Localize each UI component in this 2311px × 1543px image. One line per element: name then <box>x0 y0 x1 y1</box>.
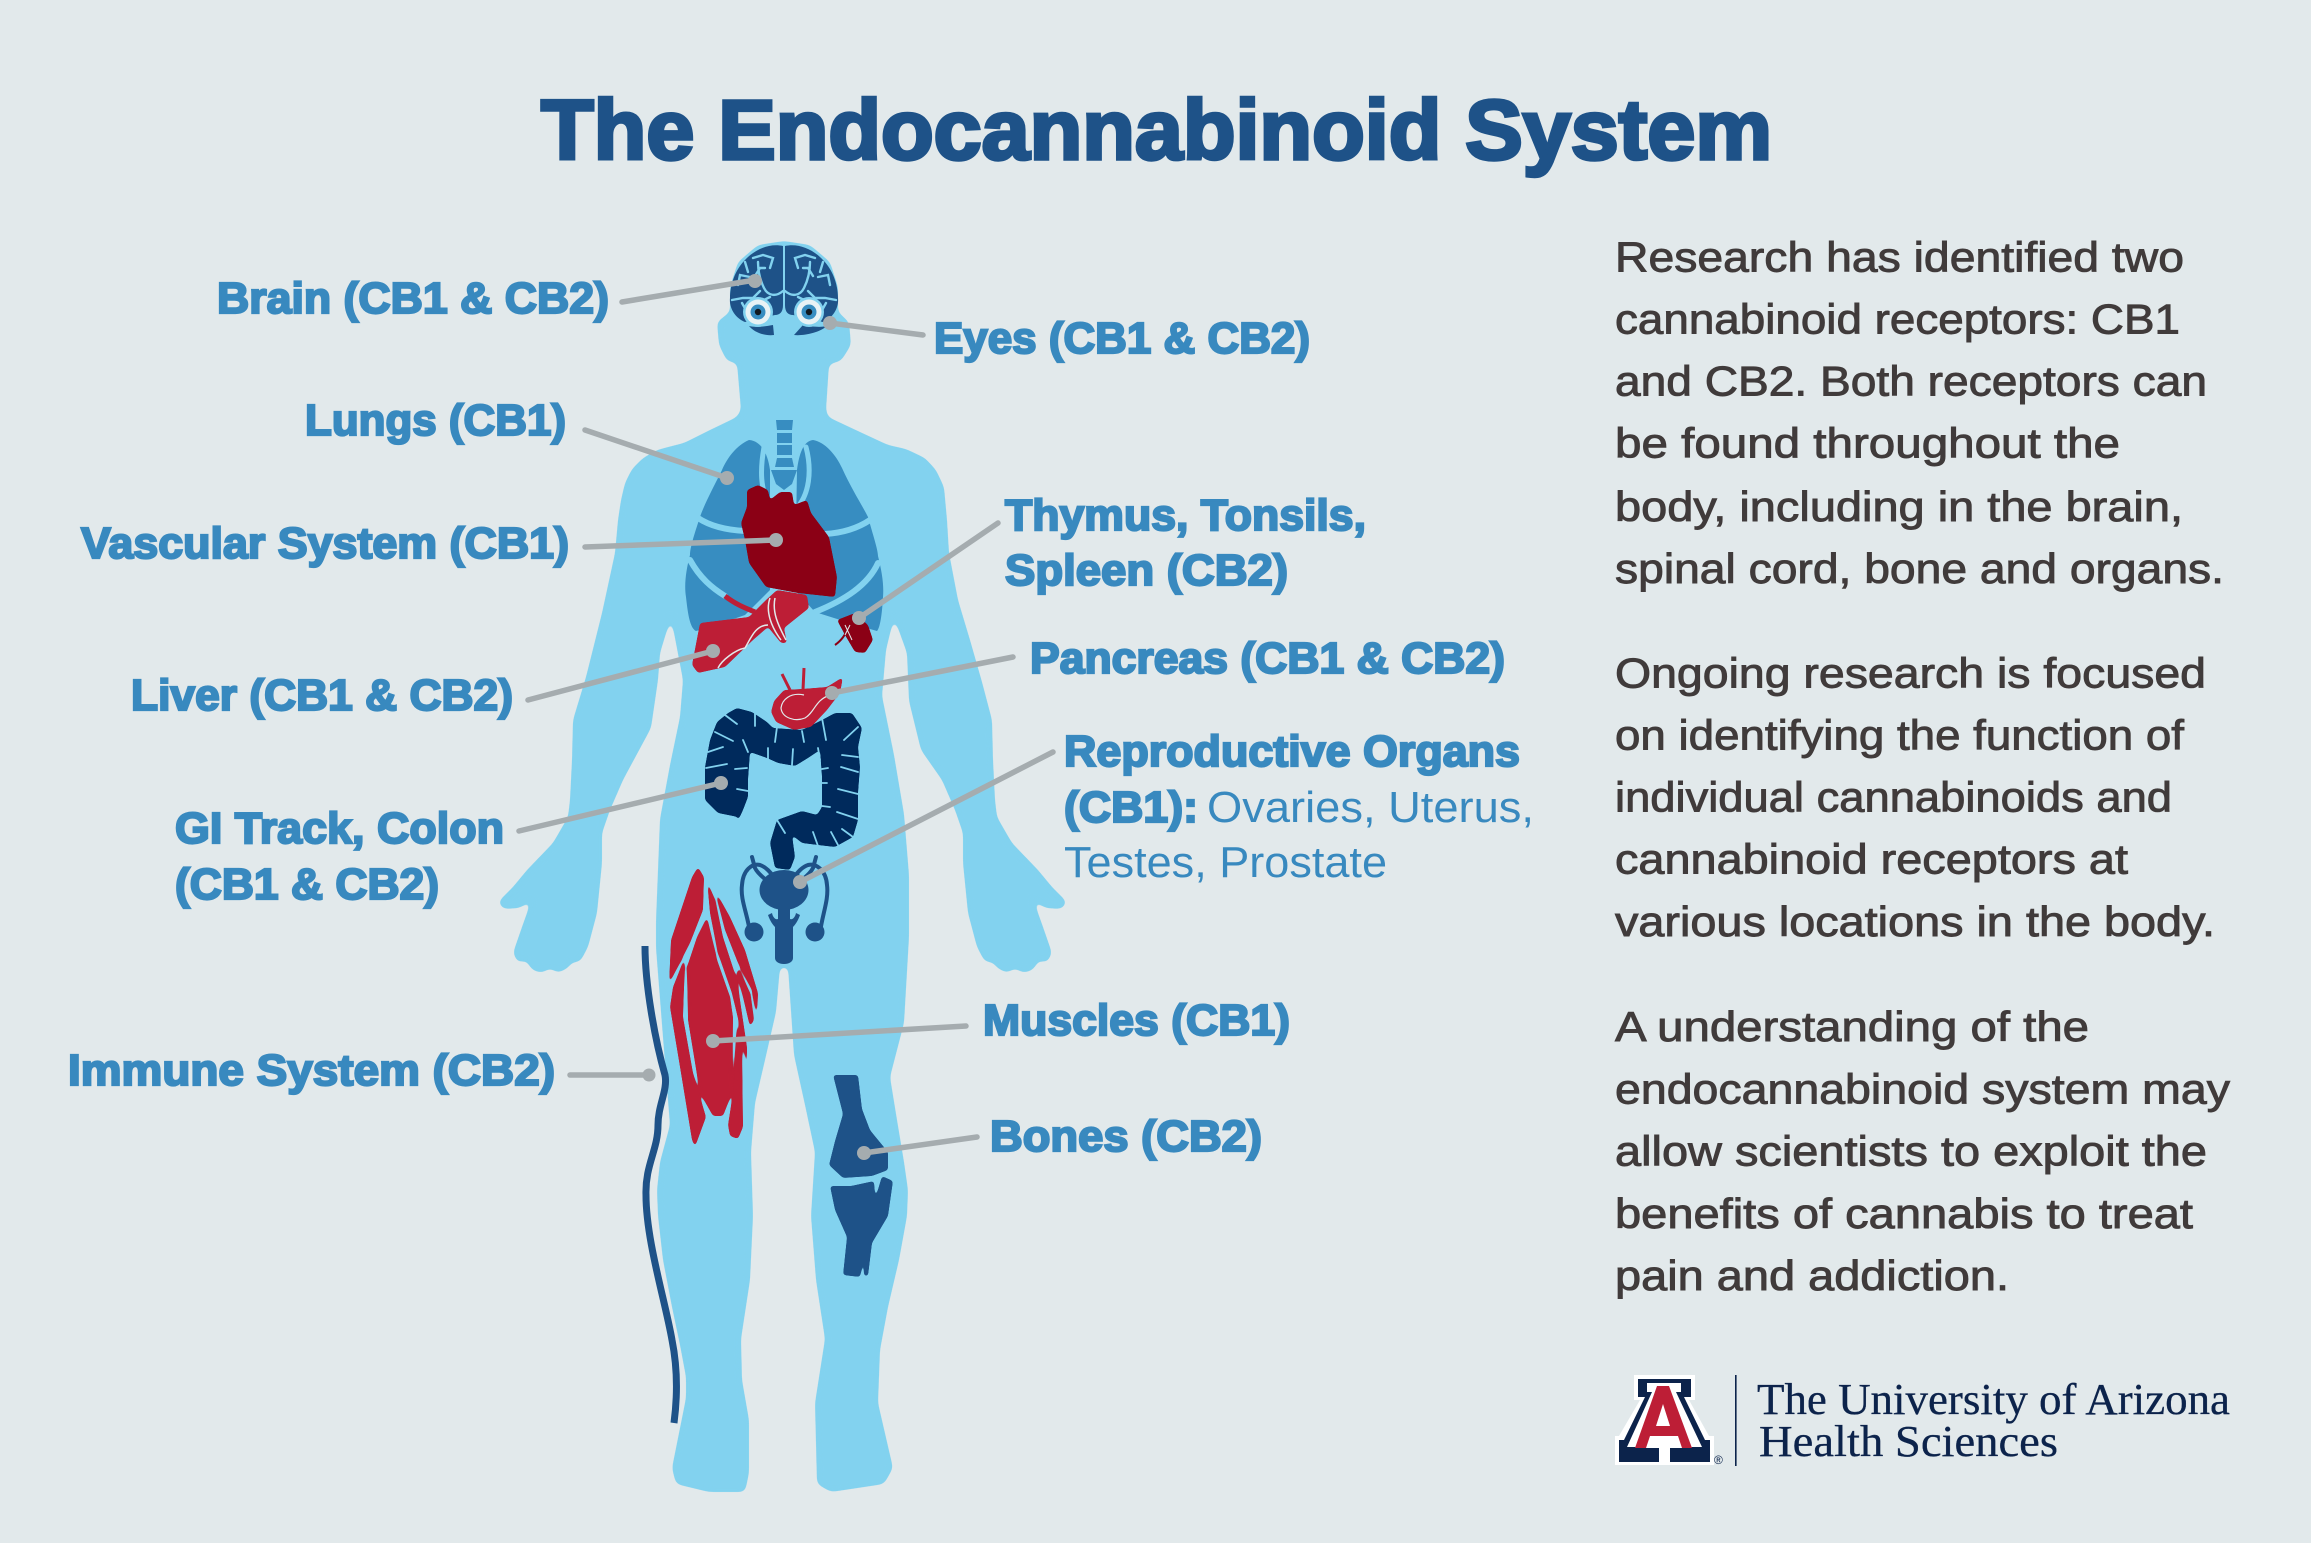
text block: paragraph 2: Ongoing research is focused <box>1615 650 2206 696</box>
text block: paragraph 2: on identifying the function of <box>1615 712 2184 758</box>
text block: paragraph 3: A understanding of the <box>1615 1003 2089 1050</box>
registered mark: ® <box>1714 1453 1723 1467</box>
logo: University of Arizona block A <box>1615 1375 1714 1465</box>
label: lungs <box>305 396 734 485</box>
text block: paragraph 2: various locations in the body. <box>1615 898 2215 945</box>
organ: leg muscles <box>669 867 758 1147</box>
organ: liver and stomach <box>692 590 809 673</box>
logo wordmark: Health Sciences <box>1759 1417 2058 1466</box>
organ: brain <box>730 245 838 335</box>
text block: paragraph 1: body, including in the brain, <box>1615 483 2183 530</box>
organ: colon <box>705 708 862 870</box>
label: liver <box>131 644 720 720</box>
label: thymus, tonsils, spleen <box>852 491 1366 625</box>
text block: paragraph 2: cannabinoid receptors at <box>1615 836 2128 882</box>
label: thymus, tonsils, spleen: Spleen (CB2) <box>1005 546 1288 595</box>
text block: paragraph 3: pain and addiction. <box>1615 1252 2009 1299</box>
text block: paragraph 2: individual cannabinoids and <box>1615 774 2172 820</box>
organ: heart <box>741 485 837 597</box>
text block: paragraph 3: benefits of cannabis to treat <box>1615 1190 2193 1237</box>
text block: paragraph 2 <box>1615 650 2215 945</box>
label: reproductive organs: Reproductive Organs <box>1064 727 1520 776</box>
title: The Endocannabinoid System <box>541 83 1772 177</box>
label: bones <box>857 1112 1262 1161</box>
organ: knee bones <box>829 1075 893 1277</box>
text block: paragraph 3 <box>1615 1003 2230 1299</box>
label: thymus, tonsils, spleen: Thymus, Tonsils, <box>1005 491 1366 540</box>
icon: eyes <box>743 297 824 327</box>
label: reproductive organs <box>793 727 1534 889</box>
text block: paragraph 1: and CB2. Both receptors can <box>1615 358 2207 404</box>
organ: reproductive organs <box>742 857 827 964</box>
text block: paragraph 1: cannabinoid receptors: CB1 <box>1615 296 2180 342</box>
label: eyes: Eyes (CB1 & CB2) <box>934 314 1310 363</box>
label: pancreas <box>825 634 1505 700</box>
body silhouette <box>498 241 1067 1492</box>
label: reproductive organs: Testes, Prostate <box>1064 838 1387 887</box>
logo wordmark: The University of Arizona <box>1757 1375 2230 1424</box>
organ: immune system nerve line <box>645 946 676 1423</box>
label: pancreas: Pancreas (CB1 & CB2) <box>1030 634 1505 683</box>
label: GI track, colon: (CB1 & CB2) <box>175 860 439 909</box>
organ: pancreas <box>771 668 843 730</box>
label: liver: Liver (CB1 & CB2) <box>131 671 513 720</box>
text block: paragraph 1 <box>1615 234 2224 592</box>
human body figure <box>498 241 1067 1492</box>
label: bones: Bones (CB2) <box>990 1112 1262 1161</box>
label: muscles: Muscles (CB1) <box>983 996 1290 1045</box>
logo wordmark <box>1757 1375 2230 1466</box>
organ: lungs and trachea <box>685 420 883 631</box>
label: brain: Brain (CB1 & CB2) <box>217 274 609 323</box>
text block: paragraph 1: spinal cord, bone and organs. <box>1615 545 2224 592</box>
label: vascular system <box>81 519 783 568</box>
text block: paragraph 1: be found throughout the <box>1615 420 2120 466</box>
label: lungs: Lungs (CB1) <box>305 396 566 445</box>
label: reproductive organs: Ovaries, Uterus, <box>1207 783 1534 832</box>
logo divider <box>1735 1375 1737 1466</box>
organ: spleen <box>835 613 873 653</box>
label: GI track, colon <box>175 776 728 909</box>
label: reproductive organs: (CB1): <box>1064 783 1198 832</box>
label: vascular system: Vascular System (CB1) <box>81 519 569 568</box>
label: immune system: Immune System (CB2) <box>68 1046 555 1095</box>
text block: paragraph 3: allow scientists to exploit the <box>1615 1128 2207 1174</box>
label: muscles <box>706 996 1290 1048</box>
text block: paragraph 3: endocannabinoid system may <box>1615 1066 2230 1112</box>
label: GI track, colon: GI Track, Colon <box>175 804 504 853</box>
text block: paragraph 1: Research has identified two <box>1615 234 2184 280</box>
